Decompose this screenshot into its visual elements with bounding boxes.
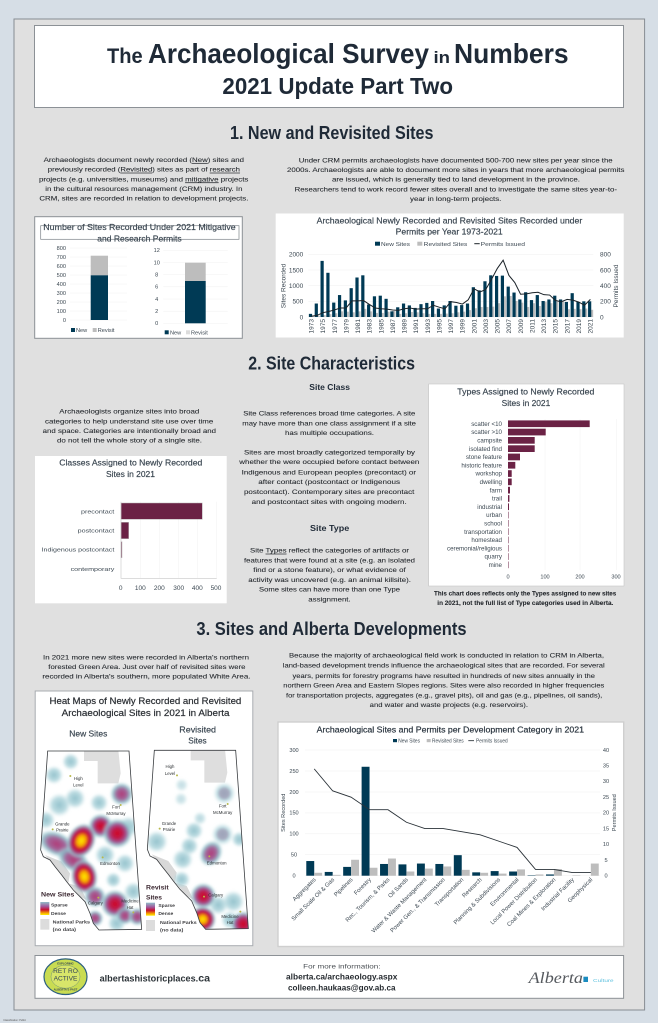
town labels: Prairie — [163, 827, 176, 832]
title banner: in — [434, 48, 450, 67]
research stacked bar: 4 — [155, 297, 158, 303]
chart note: in 2021, not the full list of Type categories used in Alberta. — [437, 600, 614, 607]
value axis — [506, 575, 621, 581]
text block: site categories intro: do not tell the whole story of a single site. — [57, 438, 202, 445]
right axis: 0 — [604, 874, 608, 880]
year labels: 1991 — [413, 319, 420, 333]
research stacked bar: 10 — [154, 260, 160, 266]
town labels: Level — [165, 771, 175, 776]
year labels: 1993 — [425, 319, 432, 333]
mitigative stacked bar: New — [76, 328, 88, 334]
legend: Revisited Sites — [424, 242, 467, 248]
text block: green and white area: recorded in Alberta's southern, more populated White Area. — [42, 674, 251, 681]
category labels: isolated find — [469, 446, 503, 453]
year labels: 1995 — [436, 319, 443, 333]
year labels: 2009 — [518, 319, 525, 333]
text block: new and revisited definitions: CRM, sites are recorded in relation to development projects. — [39, 196, 249, 203]
title banner: 2021 Update Part Two — [222, 73, 453, 99]
bars and permit line — [309, 260, 593, 317]
legend — [375, 242, 525, 248]
year labels: 1997 — [448, 319, 455, 333]
town labels: Grande — [162, 821, 177, 826]
chart: classes assigned — [35, 456, 227, 603]
right axis: 40 — [603, 748, 609, 754]
town labels: Hat — [127, 905, 134, 910]
text block: site class description: after contact (postcontact or Indigenous — [258, 479, 400, 486]
text block: CRM permits: year in long-term projects. — [410, 196, 502, 203]
legend: new sites: Dense — [51, 911, 66, 917]
category labels: contemporary — [71, 567, 114, 573]
right axis: 0 — [600, 314, 604, 321]
chart title: Archaeological Newly Recorded and Revisited Sites Recorded under — [317, 215, 583, 225]
year labels: 1983 — [367, 319, 374, 333]
mitigative stacked bar — [57, 246, 127, 334]
icon: retro active logo: RET RO — [53, 968, 78, 975]
text block: site class description: and postcontact sites with ongoing modern. — [252, 499, 407, 506]
left axis: 200 — [289, 790, 299, 796]
contact information — [286, 963, 398, 993]
category labels: Indigenous postcontact — [42, 548, 115, 554]
research stacked bar: 6 — [155, 285, 158, 291]
right axis: 25 — [603, 795, 609, 801]
mitigative stacked bar: 200 — [57, 300, 66, 306]
left axis: 150 — [289, 811, 299, 817]
axis title: permits issued: Permits Issued — [613, 264, 620, 308]
text block: CRM permits: Researchers tend to work record fewer sites overall and to investigate the same sites year-to- — [295, 186, 617, 193]
left axis: 100 — [289, 832, 299, 838]
legend: revisit sites: (no data) — [160, 927, 184, 933]
value axis: 200 — [154, 585, 165, 592]
category labels: quarry — [484, 554, 503, 561]
icon: retro active logo: EXPLORING — [57, 962, 74, 966]
category labels: precontact — [81, 509, 115, 515]
legend — [393, 738, 508, 744]
text block: site type description: features that were found at a site (e.g. an isolated — [244, 557, 416, 564]
icon: retro active logo — [44, 959, 87, 994]
category labels: Rec., Tourism, & Parks — [345, 877, 391, 924]
map: new sites heat map — [40, 750, 142, 932]
town labels: McMurray — [106, 811, 126, 816]
text block: land-based development: years, permits for forestry programs have resulted in hundreds of new sites annually in the — [292, 673, 596, 680]
research stacked bar: New — [170, 330, 182, 336]
legend: revisit sites — [146, 884, 197, 933]
category labels: farm — [490, 487, 502, 494]
left axis: 50 — [291, 852, 297, 858]
legend: revisit sites: National Parks — [160, 920, 197, 926]
text block: green and white area: forested Green Area. Just over half of revisited sites were — [48, 664, 246, 671]
mitigative stacked bar: Revisit — [98, 328, 115, 334]
town labels: Calgary — [88, 900, 104, 905]
left axis: 500 — [292, 299, 304, 306]
category labels: mine — [489, 562, 503, 569]
year labels: 2003 — [483, 319, 490, 333]
category labels: historic feature — [461, 462, 503, 469]
town labels: Grande — [55, 822, 70, 827]
title banner: Archaeological Survey — [148, 38, 429, 69]
category labels: workshop — [475, 471, 503, 478]
category labels: trail — [492, 496, 502, 503]
map label: revisited sites: Revisited — [179, 725, 216, 735]
legend: Permits Issued — [476, 738, 508, 744]
chart title: Number of Sites Recorded Under 2021 Mitigative — [43, 222, 236, 232]
axis title: permits issued: Permits Issued — [612, 794, 618, 831]
classification label: Classification: Public — [3, 1018, 26, 1022]
text block: new and revisited definitions: previously recorded ( Revisited ) sites as part of research — [48, 167, 241, 174]
town labels: McMurray — [213, 810, 233, 815]
town labels: Edmonton — [100, 861, 120, 866]
category labels: Transportation — [434, 877, 465, 908]
value axis: 400 — [192, 585, 203, 592]
alberta culture logo: Alberta — [527, 970, 583, 987]
icon: retro active logo: ALBERTA'S PAST — [54, 988, 78, 992]
right axis: 200 — [600, 299, 611, 306]
text block: land-based development: Because the majority of archaeological field work is conducted in relation to CRM in Alberta, — [289, 653, 604, 660]
text block: green and white area — [42, 654, 251, 681]
legend: new sites — [40, 891, 90, 933]
text block: site class description: has multiple occupations. — [285, 430, 374, 437]
legend: revisit sites: Revisit — [146, 884, 169, 891]
text block: CRM permits: are issued, which is generally tied to land development in the province. — [332, 177, 580, 184]
text block: site class description: Sites are most broadly categorized temporally by — [244, 449, 416, 456]
text block: site type description: assignment. — [308, 596, 351, 604]
category labels: urban — [486, 512, 503, 519]
town labels: High — [166, 764, 175, 769]
category labels: Power Gen., & Transmission — [390, 877, 447, 934]
text block: site type description: find or a stone feature), or what evidence of — [253, 567, 406, 574]
mitigative stacked bar: 600 — [57, 264, 66, 270]
category labels: Research — [462, 877, 484, 899]
bars and permit line — [306, 767, 599, 876]
town labels: Prairie — [56, 828, 69, 833]
year labels: 1981 — [355, 319, 362, 333]
towns — [159, 774, 241, 913]
left axis — [289, 252, 304, 321]
left axis: 250 — [289, 769, 299, 775]
mitigative stacked bar: 700 — [57, 255, 66, 261]
mitigative stacked bar: 300 — [57, 291, 66, 297]
category labels: Oil Sands — [388, 877, 410, 899]
legend: new sites: Sparse — [51, 903, 68, 909]
year labels: 1975 — [320, 319, 327, 333]
right axis: 30 — [603, 779, 609, 785]
mitigative stacked bar: 0 — [63, 318, 66, 324]
value axis: 300 — [611, 575, 621, 581]
category labels: school — [484, 520, 502, 528]
year labels: 2019 — [576, 319, 583, 333]
value axis: 300 — [173, 585, 185, 592]
panel title: Archaeological Sites in 2021 in Alberta — [62, 708, 230, 718]
category labels: Aggregates — [292, 877, 318, 903]
year labels: 2011 — [530, 319, 536, 333]
panel title — [50, 696, 241, 718]
year labels: 1973 — [308, 319, 316, 333]
year labels — [308, 319, 595, 333]
chart: newly recorded and revisited per year — [276, 214, 624, 338]
text block: land-based development: and water and waste projects (e.g. reservoirs). — [370, 702, 528, 709]
category labels — [447, 421, 503, 569]
text block: new and revisited definitions — [39, 157, 249, 203]
category labels: Forestry — [353, 877, 373, 897]
category labels: homestead — [471, 537, 503, 544]
research stacked bar: 12 — [154, 248, 160, 254]
right axis — [603, 748, 609, 880]
left axis: 1500 — [289, 267, 304, 274]
panel title: Heat Maps of Newly Recorded and Revisited — [50, 696, 241, 706]
town labels: Edmonton — [207, 860, 227, 865]
chart title: and Research Permits — [97, 233, 182, 243]
town labels: Fort — [112, 804, 121, 809]
text block: site categories intro — [43, 409, 217, 445]
text block: CRM permits: 2000s. Archaeologists are able to document more sites in years that more archaeological permits — [287, 167, 624, 174]
contact information: colleen.haukaas@gov.ab.ca — [288, 984, 396, 993]
horizontal bars — [121, 503, 202, 558]
text block: land-based development: northern Green Area and Eastern Slopes regions. Sites were also recorded in higher frequencies — [283, 682, 604, 689]
category labels: postcontact — [78, 528, 115, 534]
category labels: Geophysical — [567, 877, 594, 904]
mitigative stacked bar: 500 — [57, 273, 66, 279]
contact information: alberta.ca/archaeology.aspx — [286, 972, 398, 981]
text block: new and revisited definitions: in the cultural resources management (CRM) industry. In — [45, 186, 243, 193]
title banner: Numbers — [454, 38, 569, 69]
text block: site class description: postcontact). Contemporary sites are precontact — [244, 489, 415, 496]
year labels: 2005 — [495, 319, 502, 333]
right axis: 400 — [600, 283, 611, 290]
category labels: Coal Mines & Exploration — [506, 877, 557, 928]
legend: Permits Issued — [481, 242, 525, 248]
value axis: 0 — [506, 575, 510, 581]
town labels: High — [74, 776, 83, 781]
text block: CRM permits — [287, 157, 624, 203]
text block: new and revisited definitions: Archaeologists document newly recorded ( New ) sites and — [44, 157, 245, 164]
map label: new sites: New Sites — [69, 729, 107, 739]
chart note — [434, 591, 617, 607]
text block: land-based development: land-based development trends influence the archaeological sites that are recorded. For several — [283, 663, 605, 670]
right axis — [600, 252, 611, 321]
towns — [52, 775, 134, 913]
value axis: 200 — [575, 575, 585, 581]
mitigative stacked bar: 800 — [57, 246, 66, 252]
value axis — [119, 585, 222, 592]
right axis: 5 — [604, 858, 608, 864]
left axis: 0 — [292, 874, 296, 880]
chart: types assigned — [429, 384, 624, 586]
town labels: Medicine — [121, 898, 139, 903]
footer panel — [35, 956, 624, 998]
text block: site class description — [238, 411, 420, 506]
town labels: Calgary — [208, 893, 224, 898]
year labels: 2021 — [588, 319, 595, 333]
legend: new sites: (no data) — [53, 927, 76, 933]
town labels — [162, 764, 239, 925]
category labels: Planning & Subdivisions — [453, 877, 502, 926]
year labels: 2007 — [506, 319, 513, 333]
subheading: site class: Site Class — [309, 382, 350, 392]
mitigative stacked bar: 100 — [57, 309, 66, 315]
mitigative stacked bar: 400 — [57, 282, 66, 288]
year labels: 1985 — [378, 319, 385, 333]
axis title: sites recorded: Sites Recorded — [281, 794, 287, 832]
map: revisited sites heat map — [145, 749, 257, 937]
category labels: scatter >10 — [471, 429, 503, 436]
category labels: industrial — [477, 504, 502, 511]
year labels: 1999 — [460, 319, 467, 333]
axis title: sites recorded: Sites Recorded — [280, 263, 288, 308]
text block: site class description: Indigenous and European peoples (precontact) or — [242, 469, 417, 476]
category labels: dwelling — [480, 479, 503, 486]
category labels — [42, 509, 115, 573]
heading: section 2: 2. Site Characteristics — [248, 353, 415, 373]
legend: New Sites — [381, 242, 410, 248]
alberta culture logo: Culture — [593, 978, 614, 983]
category labels: Industrial Facility — [541, 877, 576, 912]
category labels: Small Scale Oil & Gas — [291, 877, 336, 922]
legend: Revisited Sites — [432, 738, 464, 744]
research stacked bar: 8 — [155, 273, 158, 279]
chart note: This chart does reflects only the Types assigned to new sites — [434, 591, 617, 598]
left axis: 300 — [289, 748, 299, 754]
text block: site type description: activity was uncovered (e.g. an animal killsite). — [248, 577, 411, 584]
town labels — [55, 776, 139, 910]
chart: sites and permits per development category — [278, 722, 624, 946]
year labels: 1989 — [402, 319, 409, 333]
website: albertashistoricplaces.ca — [100, 973, 210, 985]
value axis: 500 — [211, 585, 222, 592]
chart title: Archaeological Sites and Permits per Development Category in 2021 — [317, 725, 584, 735]
year labels: 2001 — [471, 319, 478, 333]
category labels: stone feature — [466, 454, 503, 461]
category labels — [291, 877, 594, 935]
chart title — [59, 457, 203, 479]
icon: retro active logo: ACTIVE — [54, 976, 78, 983]
left axis: 0 — [300, 314, 304, 321]
right axis: 800 — [600, 252, 611, 259]
value axis: 100 — [135, 585, 146, 592]
text block: site type description — [244, 548, 416, 604]
right axis: 15 — [603, 826, 609, 832]
map label: revisited sites — [179, 725, 216, 746]
town labels: Hat — [227, 920, 234, 925]
year labels: 2017 — [564, 319, 571, 333]
text block: site class description: whether the were occupied before contact between — [238, 459, 420, 466]
legend: revisit sites: Dense — [158, 911, 174, 917]
year labels: 1977 — [332, 319, 339, 333]
left axis: 2000 — [289, 252, 304, 259]
chart title: Sites in 2021 — [502, 398, 551, 408]
chart title — [43, 222, 236, 243]
text block: land-based development — [283, 653, 605, 709]
text block: site categories intro: categories to help understand site use over time — [45, 418, 214, 425]
chart: sites under mitigative and research permits — [35, 217, 242, 338]
heading: section 3: 3. Sites and Alberta Developments — [196, 619, 467, 639]
chart title: Classes Assigned to Newly Recorded — [59, 457, 203, 467]
legend: new sites: New Sites — [41, 891, 75, 898]
panel: heat maps — [33, 691, 257, 946]
text block: green and white area: In 2021 more new sites were recorded in Alberta's northern — [43, 654, 250, 661]
category labels: transportation — [464, 529, 503, 536]
year labels: 1987 — [390, 319, 397, 333]
category labels: Environmental — [490, 877, 521, 908]
town labels: Fort — [219, 804, 227, 809]
chart title: Types Assigned to Newly Recorded — [457, 387, 595, 397]
category labels: Local Power Distribution — [490, 877, 539, 926]
text block: site categories intro: Archaeologists organize sites into broad — [59, 409, 200, 416]
value axis: 0 — [119, 585, 123, 592]
text block: CRM permits: Under CRM permits archaeologists have documented 500-700 new sites per year since the — [299, 157, 613, 164]
chart title — [317, 215, 583, 236]
right axis: 600 — [600, 267, 611, 274]
chart title — [457, 387, 595, 408]
category labels: Pipelines — [333, 877, 355, 898]
legend: New Sites — [398, 738, 420, 744]
year labels: 2015 — [553, 319, 560, 333]
legend: revisit sites: Sparse — [158, 903, 175, 909]
contact information: For more information: — [303, 963, 381, 970]
alberta culture logo — [527, 970, 614, 987]
title banner: The — [107, 45, 143, 68]
horizontal bars — [508, 420, 590, 568]
town labels: Level — [73, 783, 84, 788]
legend: revisit sites: Sites — [146, 894, 162, 901]
title banner — [34, 26, 624, 108]
town labels: Medicine — [221, 914, 239, 919]
left axis — [289, 748, 299, 880]
value axis: 100 — [540, 575, 550, 581]
left axis: 1000 — [289, 283, 304, 290]
category labels: scatter <10 — [471, 421, 503, 428]
text block: site type description: Site Types reflect the categories of artifacts or — [250, 548, 410, 555]
text block: site type description: Some sites can have more than one Type — [259, 586, 401, 594]
research stacked bar: 2 — [155, 309, 158, 315]
text block: site categories intro: and space. Categories are intentionally broad and — [43, 428, 217, 435]
category labels: Water & Waste Management — [371, 877, 429, 935]
right axis: 35 — [603, 764, 609, 770]
right axis: 20 — [603, 811, 609, 817]
chart title: Sites in 2021 — [106, 469, 155, 479]
text block: land-based development: for transportation projects, aggregates (e.g., gravel pits), oil and gas (e.g., pipelines, oil sands), — [286, 692, 602, 699]
research stacked bar — [154, 248, 228, 336]
heading: section 1: 1. New and Revisited Sites — [230, 123, 434, 143]
text block: site class description: Site Class references broad time categories. A site — [243, 411, 416, 418]
right axis: 10 — [603, 842, 609, 848]
text block: site class description: may have more than one class assignment if a site — [242, 420, 417, 428]
chart title: Permits per Year 1973-2021 — [396, 226, 503, 236]
category labels: ceremonial/religious — [447, 545, 502, 552]
map label: revisited sites: Sites — [188, 736, 207, 746]
year labels: 2013 — [541, 319, 548, 333]
year labels: 1979 — [343, 319, 350, 333]
legend: new sites: National Parks — [53, 919, 90, 925]
research stacked bar: 0 — [155, 321, 158, 327]
research stacked bar: Revisit — [191, 330, 208, 336]
subheading: site type: Site Type — [310, 523, 350, 533]
text block: new and revisited definitions: projects (e.g. universities, museums) and mitigative projects — [39, 176, 248, 183]
category labels: campsite — [477, 438, 503, 444]
